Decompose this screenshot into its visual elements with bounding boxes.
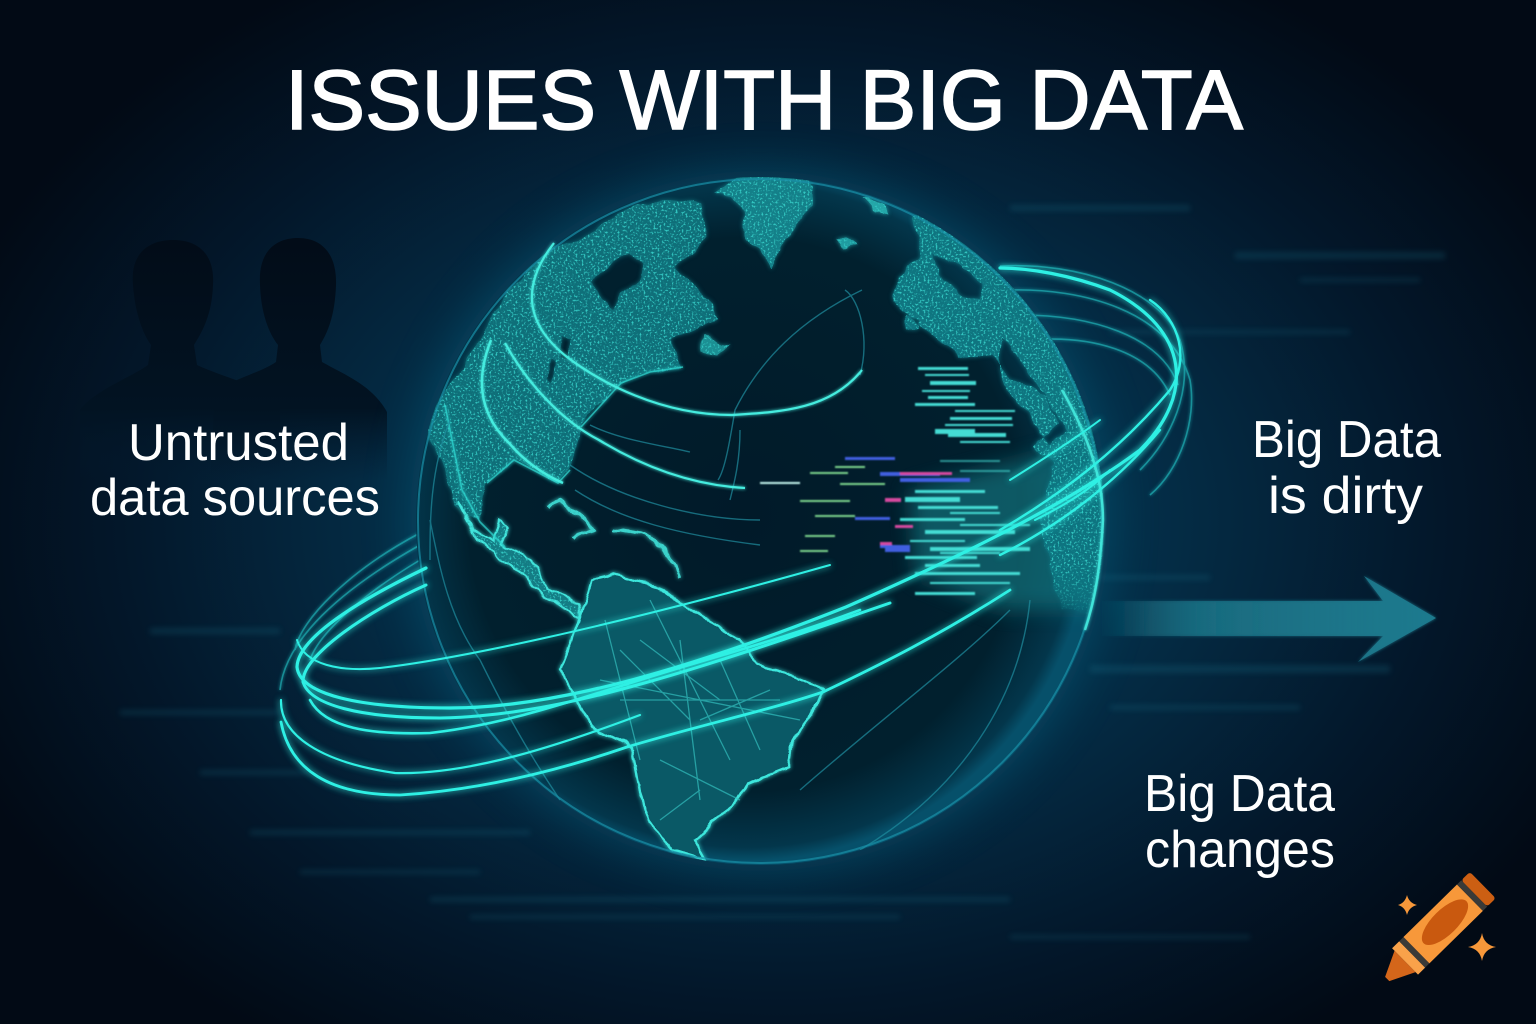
continent: Caribbean islands (547, 502, 681, 578)
label: big data is dirty: is dirty (1268, 467, 1423, 525)
continent: Iceland (838, 237, 855, 250)
globe meridian lines (430, 290, 1030, 850)
label: big data changes: changes (1145, 821, 1335, 879)
glitch stripes (760, 367, 1030, 595)
label: untrusted data sources: Untrusted (128, 414, 349, 472)
continent: Eurasia (890, 214, 1098, 464)
orbit bundle (281, 268, 1180, 795)
arrow (1100, 576, 1436, 662)
continent: Africa east (1040, 440, 1115, 620)
North America bright coast (445, 367, 683, 547)
label: big data is dirty (1252, 411, 1441, 525)
globe limb glow (418, 179, 1102, 863)
globe arcs over North America (482, 243, 1103, 630)
icon: crayon with sparkles (1374, 872, 1496, 992)
label: big data changes (1144, 765, 1335, 879)
silhouette: left person (80, 240, 280, 480)
label: untrusted data sources (90, 414, 380, 527)
silhouette: right person (210, 238, 387, 480)
label: big data changes: Big Data (1144, 765, 1335, 823)
continent: Newfoundland (700, 335, 731, 355)
back orbit arcs (280, 266, 1192, 690)
South America internal lines (600, 600, 800, 820)
title: ISSUES WITH BIG DATA (285, 53, 1243, 147)
globe sphere (416, 177, 1104, 865)
continent: North America (425, 200, 719, 520)
continent: Central America (457, 500, 582, 620)
continents (425, 170, 1115, 620)
globe (280, 170, 1192, 871)
silhouettes: two people (80, 238, 387, 480)
globe halo (410, 171, 1110, 871)
label: big data is dirty: Big Data (1252, 411, 1441, 469)
label: untrusted data sources: data sources (90, 469, 380, 527)
continent: Greenland (715, 170, 813, 267)
lit glow behind Africa (910, 440, 1110, 610)
continent: South America (560, 575, 823, 860)
